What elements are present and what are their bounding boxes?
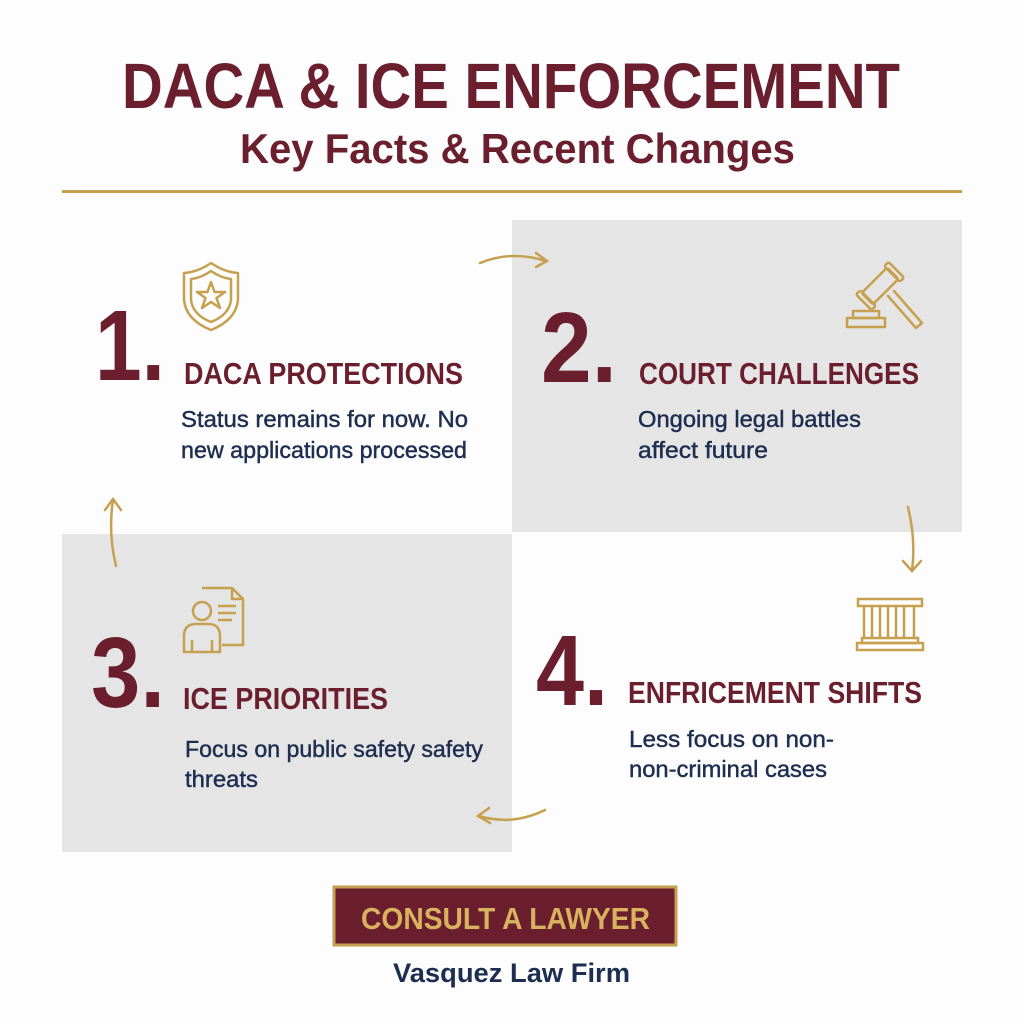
icon: courthouse columns bbox=[857, 599, 923, 650]
button: consult a lawyer: CONSULT A LAWYER bbox=[361, 901, 650, 936]
number 3: 3. bbox=[91, 617, 165, 729]
arrow: 1 to 2 bbox=[480, 253, 547, 267]
heading: ICE PRIORITIES bbox=[183, 681, 388, 716]
title: DACA & ICE ENFORCEMENT bbox=[122, 50, 900, 122]
subtitle: Key Facts & Recent Changes bbox=[240, 125, 795, 172]
body text: Ongoing legal battles bbox=[638, 406, 861, 432]
panel 1: DACA protections bbox=[95, 263, 468, 463]
arrow: 2 to 4 bbox=[903, 507, 921, 571]
heading: ENFRICEMENT SHIFTS bbox=[628, 675, 922, 710]
heading: COURT CHALLENGES bbox=[639, 356, 919, 391]
icon: gavel bbox=[847, 262, 922, 328]
arrow: 3 to 1 bbox=[105, 499, 121, 566]
panel: ice priorities background bbox=[62, 534, 512, 852]
arrow: 4 to 3 bbox=[478, 808, 545, 823]
heading: DACA PROTECTIONS bbox=[184, 356, 463, 391]
icon: person with document bbox=[184, 588, 243, 652]
body text: non-criminal cases bbox=[629, 756, 827, 782]
icon: shield bbox=[184, 263, 238, 330]
body text: Focus on public safety safety bbox=[185, 736, 483, 762]
panel 3: ICE priorities bbox=[91, 588, 483, 792]
panel: court challenges background bbox=[512, 220, 962, 532]
body text: threats bbox=[185, 766, 258, 792]
button: consult a lawyer bbox=[334, 887, 676, 945]
firm name: Vasquez Law Firm bbox=[393, 958, 630, 988]
number 4: 4. bbox=[536, 615, 608, 727]
number 2: 2. bbox=[541, 292, 617, 404]
body text: affect future bbox=[638, 437, 768, 463]
panel 2: court challenges bbox=[541, 262, 922, 463]
body text: Less focus on non- bbox=[629, 726, 834, 752]
body text: Status remains for now. No bbox=[181, 406, 468, 432]
body text: new applications processed bbox=[181, 437, 467, 463]
number 1: 1. bbox=[95, 290, 165, 402]
panel 4: enforcement shifts bbox=[536, 599, 923, 782]
